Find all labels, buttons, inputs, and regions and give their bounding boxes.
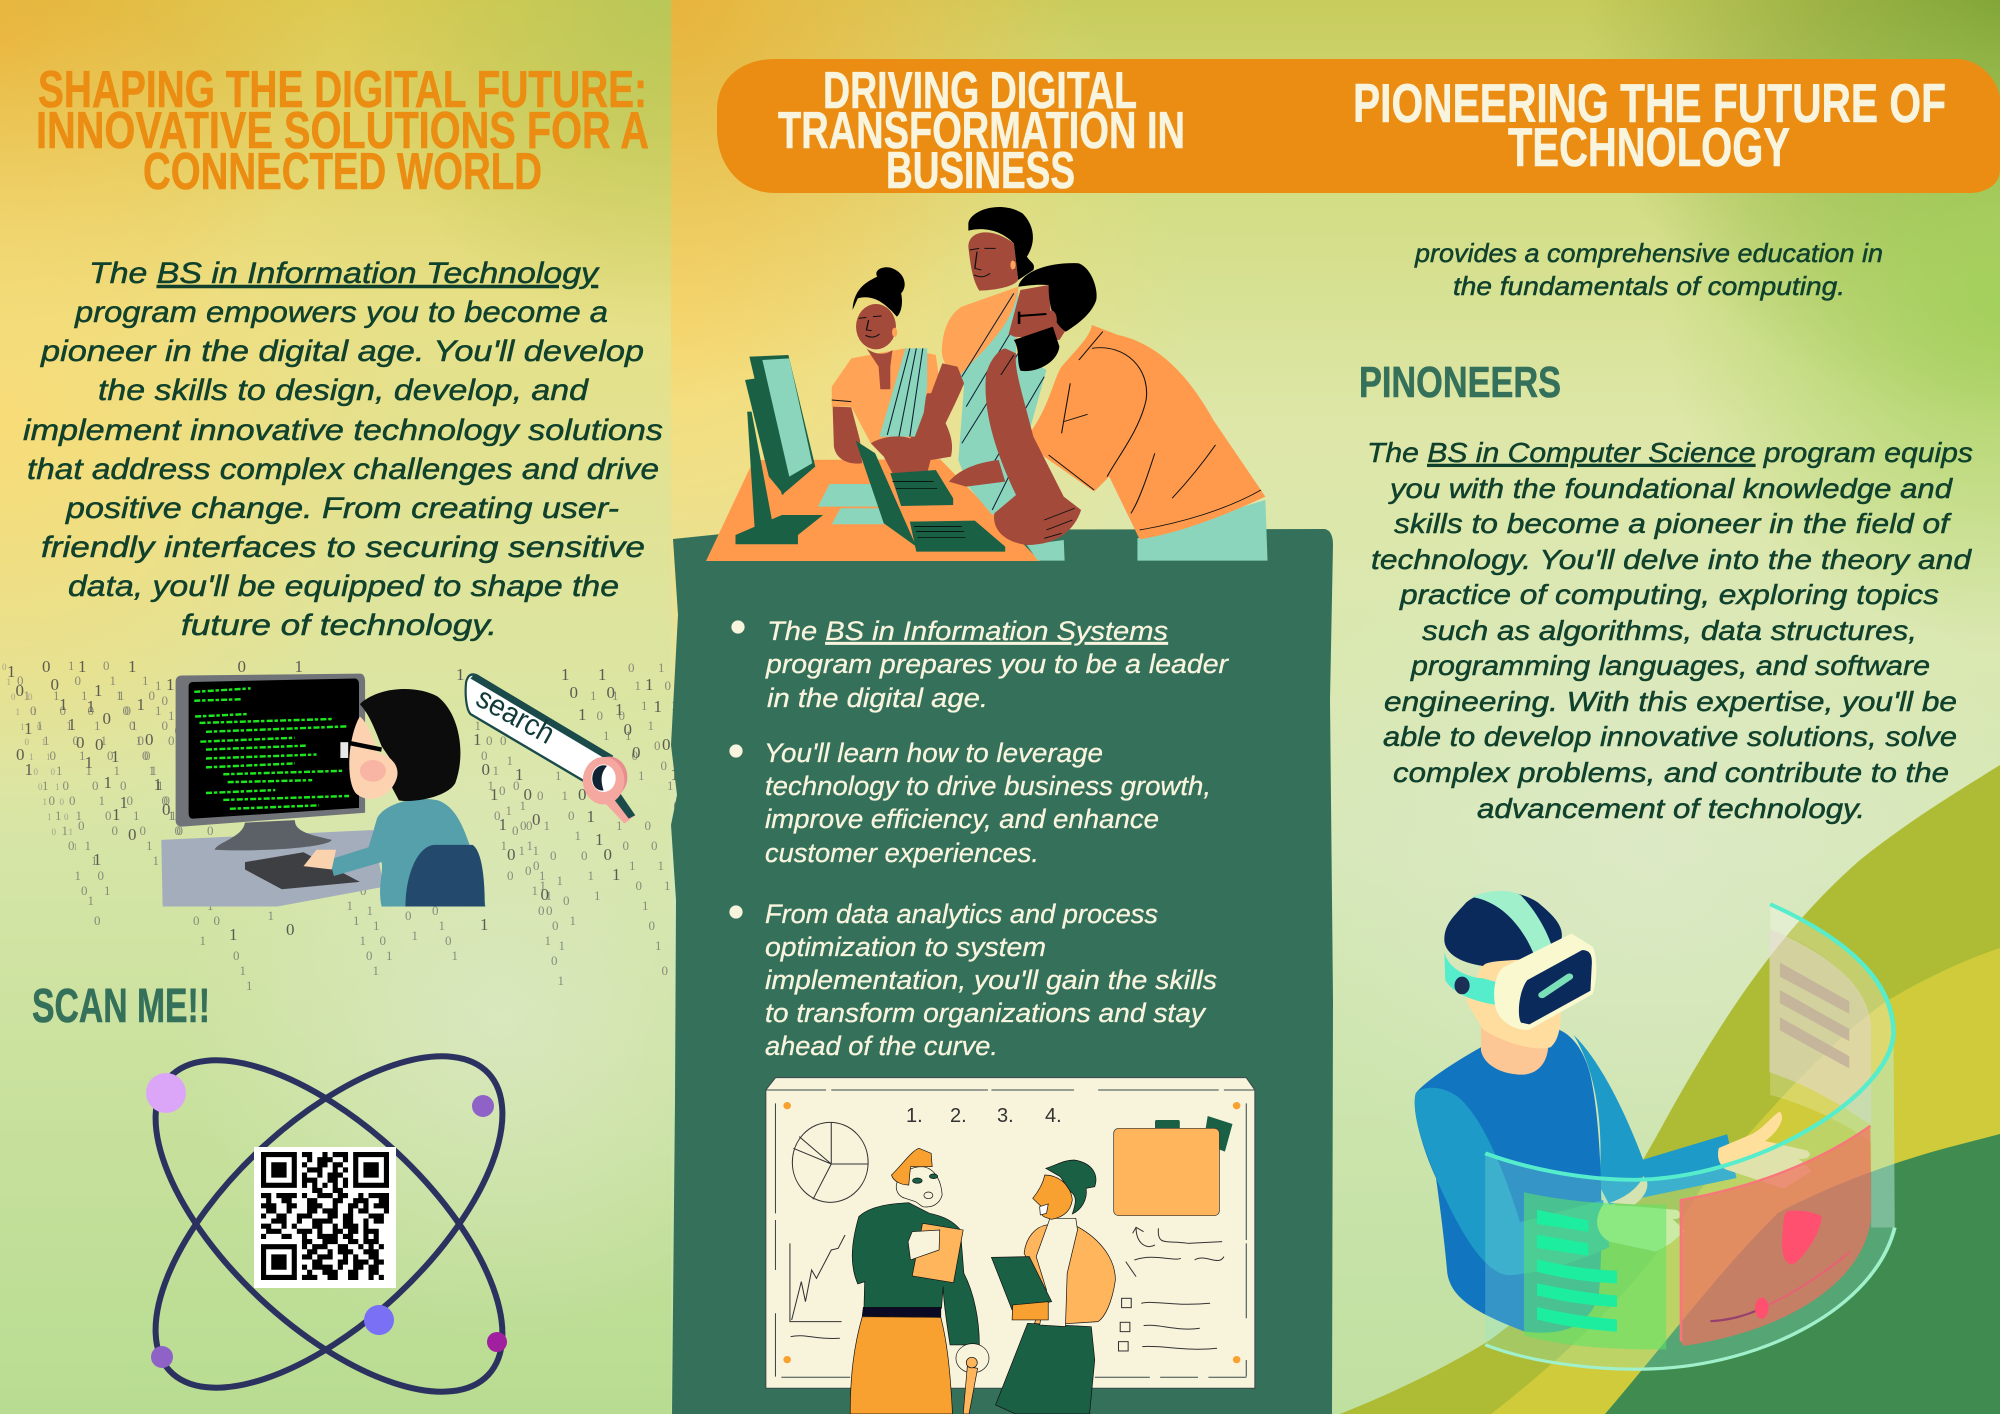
bullet 1 [732, 616, 1229, 713]
search bar label: search [471, 681, 560, 751]
text block: provides education [1414, 238, 1883, 301]
heading: pioneering the future [1353, 72, 1946, 178]
text block: BS in Information Technology: implement innovative technology solutions [23, 414, 663, 447]
front glass wall [1485, 1033, 1895, 1369]
binary rain background: 1101011 [555, 768, 600, 903]
binary rain background: 110110101 [645, 675, 722, 899]
green screen [1524, 1192, 1666, 1349]
text block: BS in Information Technology: the skills to design, develop, and [98, 374, 589, 407]
binary rain background: 101010011 [658, 660, 716, 883]
background: middle and right panels [671, 0, 2000, 1414]
icon: atom orbits around QR code [101, 1000, 557, 1414]
binary rain background: 01 [16, 745, 33, 779]
monitor [736, 355, 823, 544]
text block: BS in Computer Science: complex problems, and contribute to the [1393, 757, 1949, 788]
woman left [832, 267, 952, 464]
list: BS in Information Systems bullets [730, 616, 1229, 1061]
board numbers: 4. [1045, 1105, 1062, 1127]
text block: BS in Computer Science: programming languages, and software [1410, 650, 1930, 681]
table [706, 459, 1040, 561]
binary rain background: 1001 [392, 868, 418, 943]
line chart [790, 1235, 845, 1339]
text block: BS in Computer Science: you with the foundational knowledge and [1388, 473, 1954, 504]
back glass wall [1769, 904, 1895, 1228]
text block: BS in Information Technology: pioneer in the digital age. You'll develop [40, 335, 644, 368]
decorative hills bottom right [1340, 765, 2000, 1414]
binary rain background: 101 [7, 662, 32, 738]
bullet 3: to transform organizations and stay [765, 998, 1207, 1028]
text block: BS in Information Technology: friendly interfaces to securing sensitive [41, 531, 645, 564]
keyboard [245, 852, 360, 889]
binary rain background: 10101101001011 [68, 658, 159, 868]
binary rain background: 010110100110 [2, 662, 56, 837]
bullet 3 [730, 899, 1217, 1061]
binary rain background: 0101 [180, 873, 206, 948]
bullet 2: You'll learn how to leverage [764, 738, 1103, 768]
text block: BS in Information Technology: future of technology. [181, 609, 497, 642]
sticky note [1114, 1116, 1232, 1216]
illustration: person in VR headset with holographic screens [1415, 891, 1895, 1369]
binary rain background: 0 [215, 878, 222, 893]
text block: BS in Information Technology [23, 257, 663, 642]
board numbers: 1. [906, 1105, 923, 1127]
title: left panel heading: INNOVATIVE SOLUTIONS FOR A [36, 102, 649, 160]
binary rain background: 0101 [432, 903, 458, 963]
glass rims [1485, 904, 1895, 1369]
binary rain background: 0101 [248, 868, 274, 923]
man with clipboard [850, 1148, 989, 1414]
background: left panel [0, 0, 671, 1414]
heading: driving digital transformation [778, 62, 1185, 200]
text block: BS in Computer Science: technology. You'll delve into the theory and [1371, 544, 1973, 575]
laptops and hands [856, 436, 1005, 552]
woman with tablet [991, 1160, 1115, 1414]
board [766, 1078, 1255, 1388]
text block: BS in Computer Science: The BS in Computer Science program equips [1367, 437, 1973, 468]
binary rain background: 101011010 [155, 678, 214, 813]
bullet 1: program prepares you to be a leader [765, 649, 1229, 679]
binary rain background: 1010110100 [53, 688, 118, 838]
title: left panel heading: SHAPING THE DIGITAL FUTURE: [38, 61, 647, 119]
text block: BS in Information Technology: program empowers you to become a [74, 296, 608, 329]
binary rain background: 10110 [94, 681, 136, 844]
binary rain background: 0101011101 [500, 733, 565, 953]
binary rain background: 101 [561, 665, 586, 724]
binary rain background: 01101 [360, 883, 392, 963]
board numbers: 3. [997, 1105, 1014, 1127]
bullet 3: implementation, you'll gain the skills [765, 965, 1217, 995]
binary rain background: 010101010101 [486, 733, 564, 988]
binary rain background: 0011011 [42, 657, 102, 869]
scribbles and checklist [1118, 1227, 1224, 1351]
title: left panel heading [36, 61, 649, 201]
bullet 3: From data analytics and process [765, 899, 1158, 929]
binary rain background: 010101 [537, 788, 576, 928]
binary rain background: 1010011010 [118, 688, 183, 838]
binary rain background: 101101010 [42, 778, 100, 928]
text block: BS in Information Technology: The BS in Information Technology [89, 257, 600, 290]
hair and VR headset [1444, 891, 1596, 1030]
search bar [466, 674, 635, 824]
illustration: person at computer with code [161, 674, 635, 907]
heading: SCAN ME: SCAN ME!! [32, 980, 210, 1033]
binary rain background: 10100 [598, 665, 640, 762]
bullet 2: customer experiences. [765, 838, 1039, 868]
binary rain background: 011001011010110010 [103, 658, 220, 928]
text block: BS in Computer Science: skills to become a pioneer in the field of [1394, 508, 1953, 539]
binary rain background: 0101101001 [17, 673, 82, 823]
bullet 3: ahead of the curve. [765, 1031, 998, 1061]
bullet 1: in the digital age. [767, 683, 988, 713]
binary rain background: 0101010 [468, 688, 514, 883]
heading: pioneering the future: TECHNOLOGY [1508, 116, 1790, 178]
text block: BS in Computer Science: practice of computing, exploring topics [1399, 579, 1939, 610]
binary rain background: 10 [412, 873, 425, 903]
binary rain background: 1100 [166, 675, 200, 819]
bullet 2 [730, 738, 1211, 868]
binary rain background [2, 657, 722, 993]
text block: BS in Computer Science: engineering. With this expertise, you'll be [1384, 686, 1957, 717]
woman centre [910, 207, 1046, 515]
text block: BS in Computer Science: such as algorithms, data structures, [1422, 615, 1917, 646]
board numbers [906, 1105, 1062, 1127]
desk [161, 830, 384, 907]
binary rain background: 011100101010 [628, 660, 706, 893]
binary rain background: 011 [233, 948, 252, 993]
binary rain background: 101010011 [612, 688, 670, 893]
heading: driving digital transformation: DRIVING DIGITAL [823, 62, 1137, 120]
binary rain background: 101010101010 [590, 688, 668, 978]
binary rain background: 01101 [78, 818, 110, 898]
heading: PINONEERS: PINONEERS [1359, 358, 1561, 407]
binary rain background: 1 [480, 915, 488, 934]
text block: BS in Information Technology: data, you'll be equipped to shape the [68, 570, 619, 603]
red screen [1681, 1126, 1871, 1346]
binary rain background: 01101 [578, 785, 620, 884]
person [304, 689, 486, 907]
text block: BS in Computer Science [1367, 437, 1973, 824]
binary rain background: 01011010011 [28, 692, 78, 852]
banner: orange header [717, 59, 2000, 193]
QR code [254, 1147, 396, 1288]
monitor [176, 674, 365, 850]
text block: provides education: the fundamentals of computing. [1453, 271, 1845, 301]
binary rain background: 110101 [128, 657, 179, 869]
binary rain background: 1010011101001 [142, 673, 226, 883]
man [986, 263, 1268, 561]
pie chart [792, 1122, 868, 1202]
illustration: three people at computers [706, 207, 1268, 561]
panel: green middle panel [671, 529, 1333, 1414]
binary rain background: 01 [286, 657, 303, 939]
hands [1609, 1112, 1811, 1205]
binary rain background: 10 [229, 657, 246, 944]
text block: BS in Computer Science: advancement of technology. [1477, 793, 1865, 824]
heading: driving digital transformation: BUSINESS [886, 142, 1075, 200]
text block: provides education: provides a comprehensive education in [1414, 238, 1883, 268]
heading: driving digital transformation: TRANSFORMATION IN [778, 102, 1185, 160]
text block: BS in Computer Science: able to develop innovative solutions, solve [1383, 721, 1957, 752]
bullet 2: improve efficiency, and enhance [765, 804, 1159, 834]
person body [1415, 962, 1736, 1333]
binary rain background: 1010110 [456, 665, 516, 864]
bullet 2: technology to drive business growth, [765, 771, 1211, 801]
text block: BS in Information Technology: that address complex challenges and drive [27, 453, 659, 486]
binary rain background: 1000 [515, 765, 549, 904]
binary rain background: 01010 [520, 818, 552, 918]
binary rain background: 011101 [340, 873, 379, 978]
illustration: whiteboard with two people [766, 1078, 1255, 1414]
title: left panel heading: CONNECTED WORLD [143, 143, 542, 201]
bullet 1: The BS in Information Systems [767, 616, 1168, 646]
binary rain background: 11011 [78, 657, 120, 824]
text block: BS in Information Technology: positive change. From creating user- [65, 492, 619, 525]
bullet 3: optimization to system [765, 932, 1046, 962]
board numbers: 2. [950, 1105, 967, 1127]
